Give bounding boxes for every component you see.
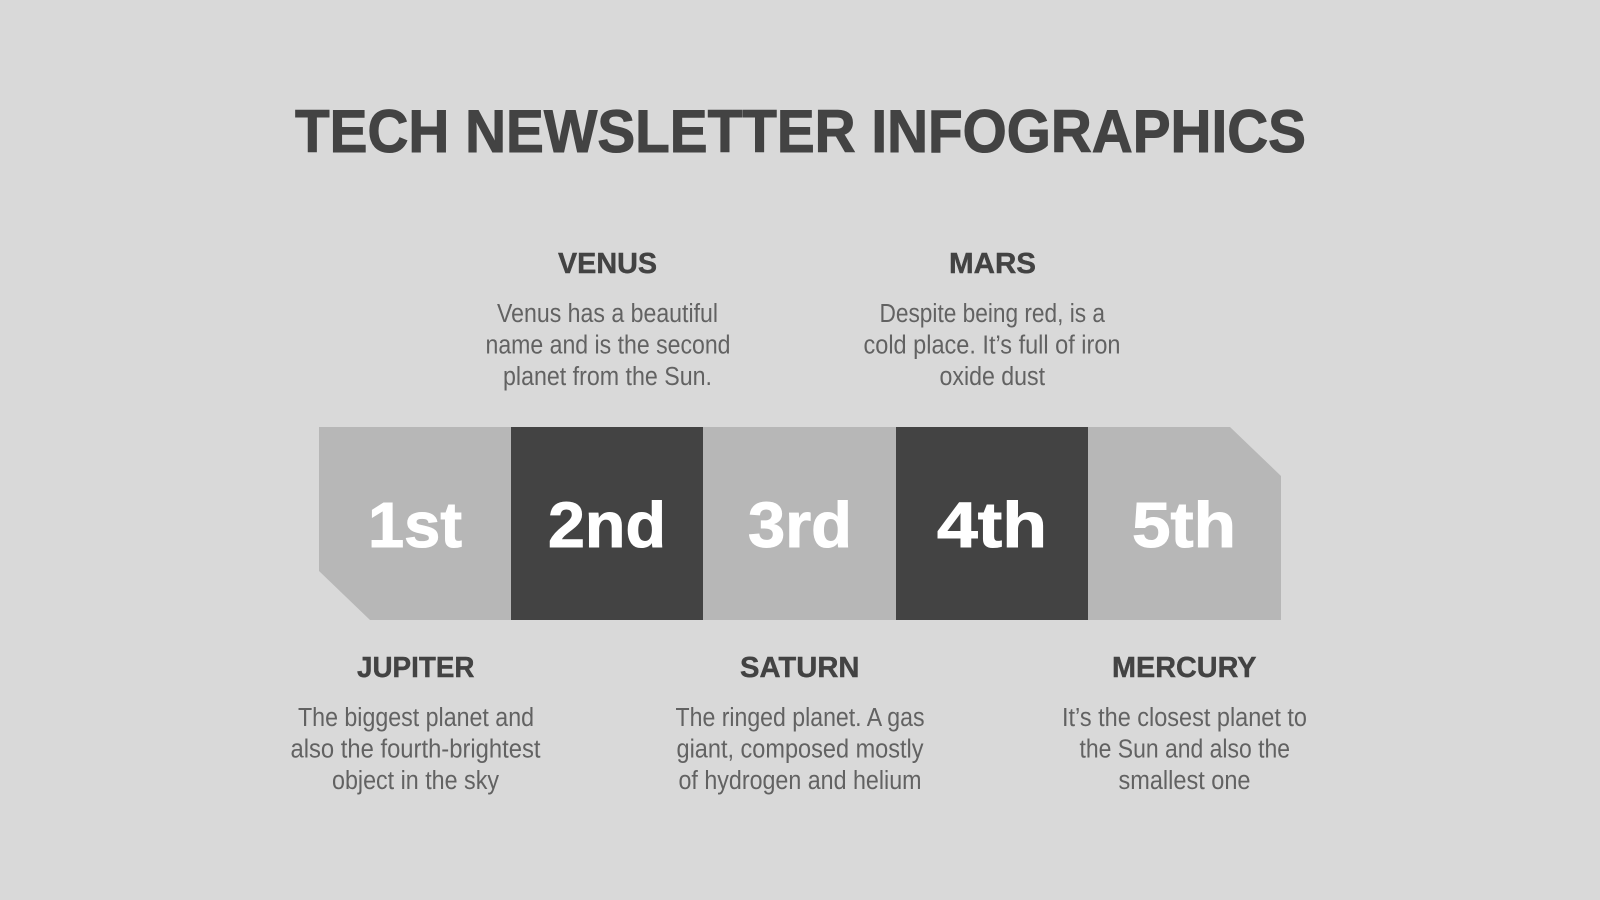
- text block: Jupiter: [290, 652, 540, 795]
- text block: Mars: [864, 248, 1120, 391]
- text block: Mercury: It’s the closest planet to: [1062, 704, 1307, 732]
- text block: Mars: oxide dust: [940, 363, 1045, 391]
- text block: Mercury: smallest one: [1118, 767, 1250, 795]
- segment: 1st: 1st: [368, 489, 462, 561]
- segment: 4th: 4th: [937, 489, 1047, 561]
- segment: 4th: [896, 427, 1088, 620]
- text block: Jupiter: also the fourth-brightest: [290, 736, 540, 764]
- segment: 1st: [319, 427, 511, 620]
- text block: Venus: name and is the second: [486, 332, 730, 360]
- segment: 2nd: 2nd: [548, 489, 666, 561]
- segment: 5th: [1088, 427, 1281, 620]
- text block: Mercury: MERCURY: [1112, 652, 1256, 684]
- text block: Mercury: the Sun and also the: [1080, 736, 1290, 764]
- text block: Saturn: giant, composed mostly: [676, 736, 924, 764]
- ranking bar: [319, 427, 1281, 620]
- text block: Jupiter: JUPITER: [357, 652, 474, 684]
- text block: Mercury: [1062, 652, 1307, 795]
- segment: 5th: 5th: [1132, 489, 1236, 561]
- text block: Mars: cold place. It’s full of iron: [864, 332, 1120, 360]
- title: TECH NEWSLETTER INFOGRAPHICS: [295, 98, 1306, 165]
- text block: Venus: [486, 248, 730, 391]
- text block: Venus: planet from the Sun.: [503, 363, 712, 391]
- text block: Jupiter: object in the sky: [332, 767, 499, 795]
- text block: Jupiter: The biggest planet and: [298, 704, 534, 732]
- text block: Saturn: of hydrogen and helium: [678, 767, 922, 795]
- text block: Saturn: [676, 652, 924, 795]
- segment: 3rd: [703, 427, 896, 620]
- text block: Mars: Despite being red, is a: [880, 300, 1106, 328]
- text block: Venus: VENUS: [558, 248, 657, 280]
- text block: Venus: Venus has a beautiful: [497, 300, 718, 328]
- text block: Saturn: SATURN: [740, 652, 860, 684]
- segment: 2nd: [511, 427, 703, 620]
- text block: Saturn: The ringed planet. A gas: [676, 704, 924, 732]
- segment: 3rd: 3rd: [748, 489, 852, 561]
- text block: Mars: MARS: [949, 248, 1036, 280]
